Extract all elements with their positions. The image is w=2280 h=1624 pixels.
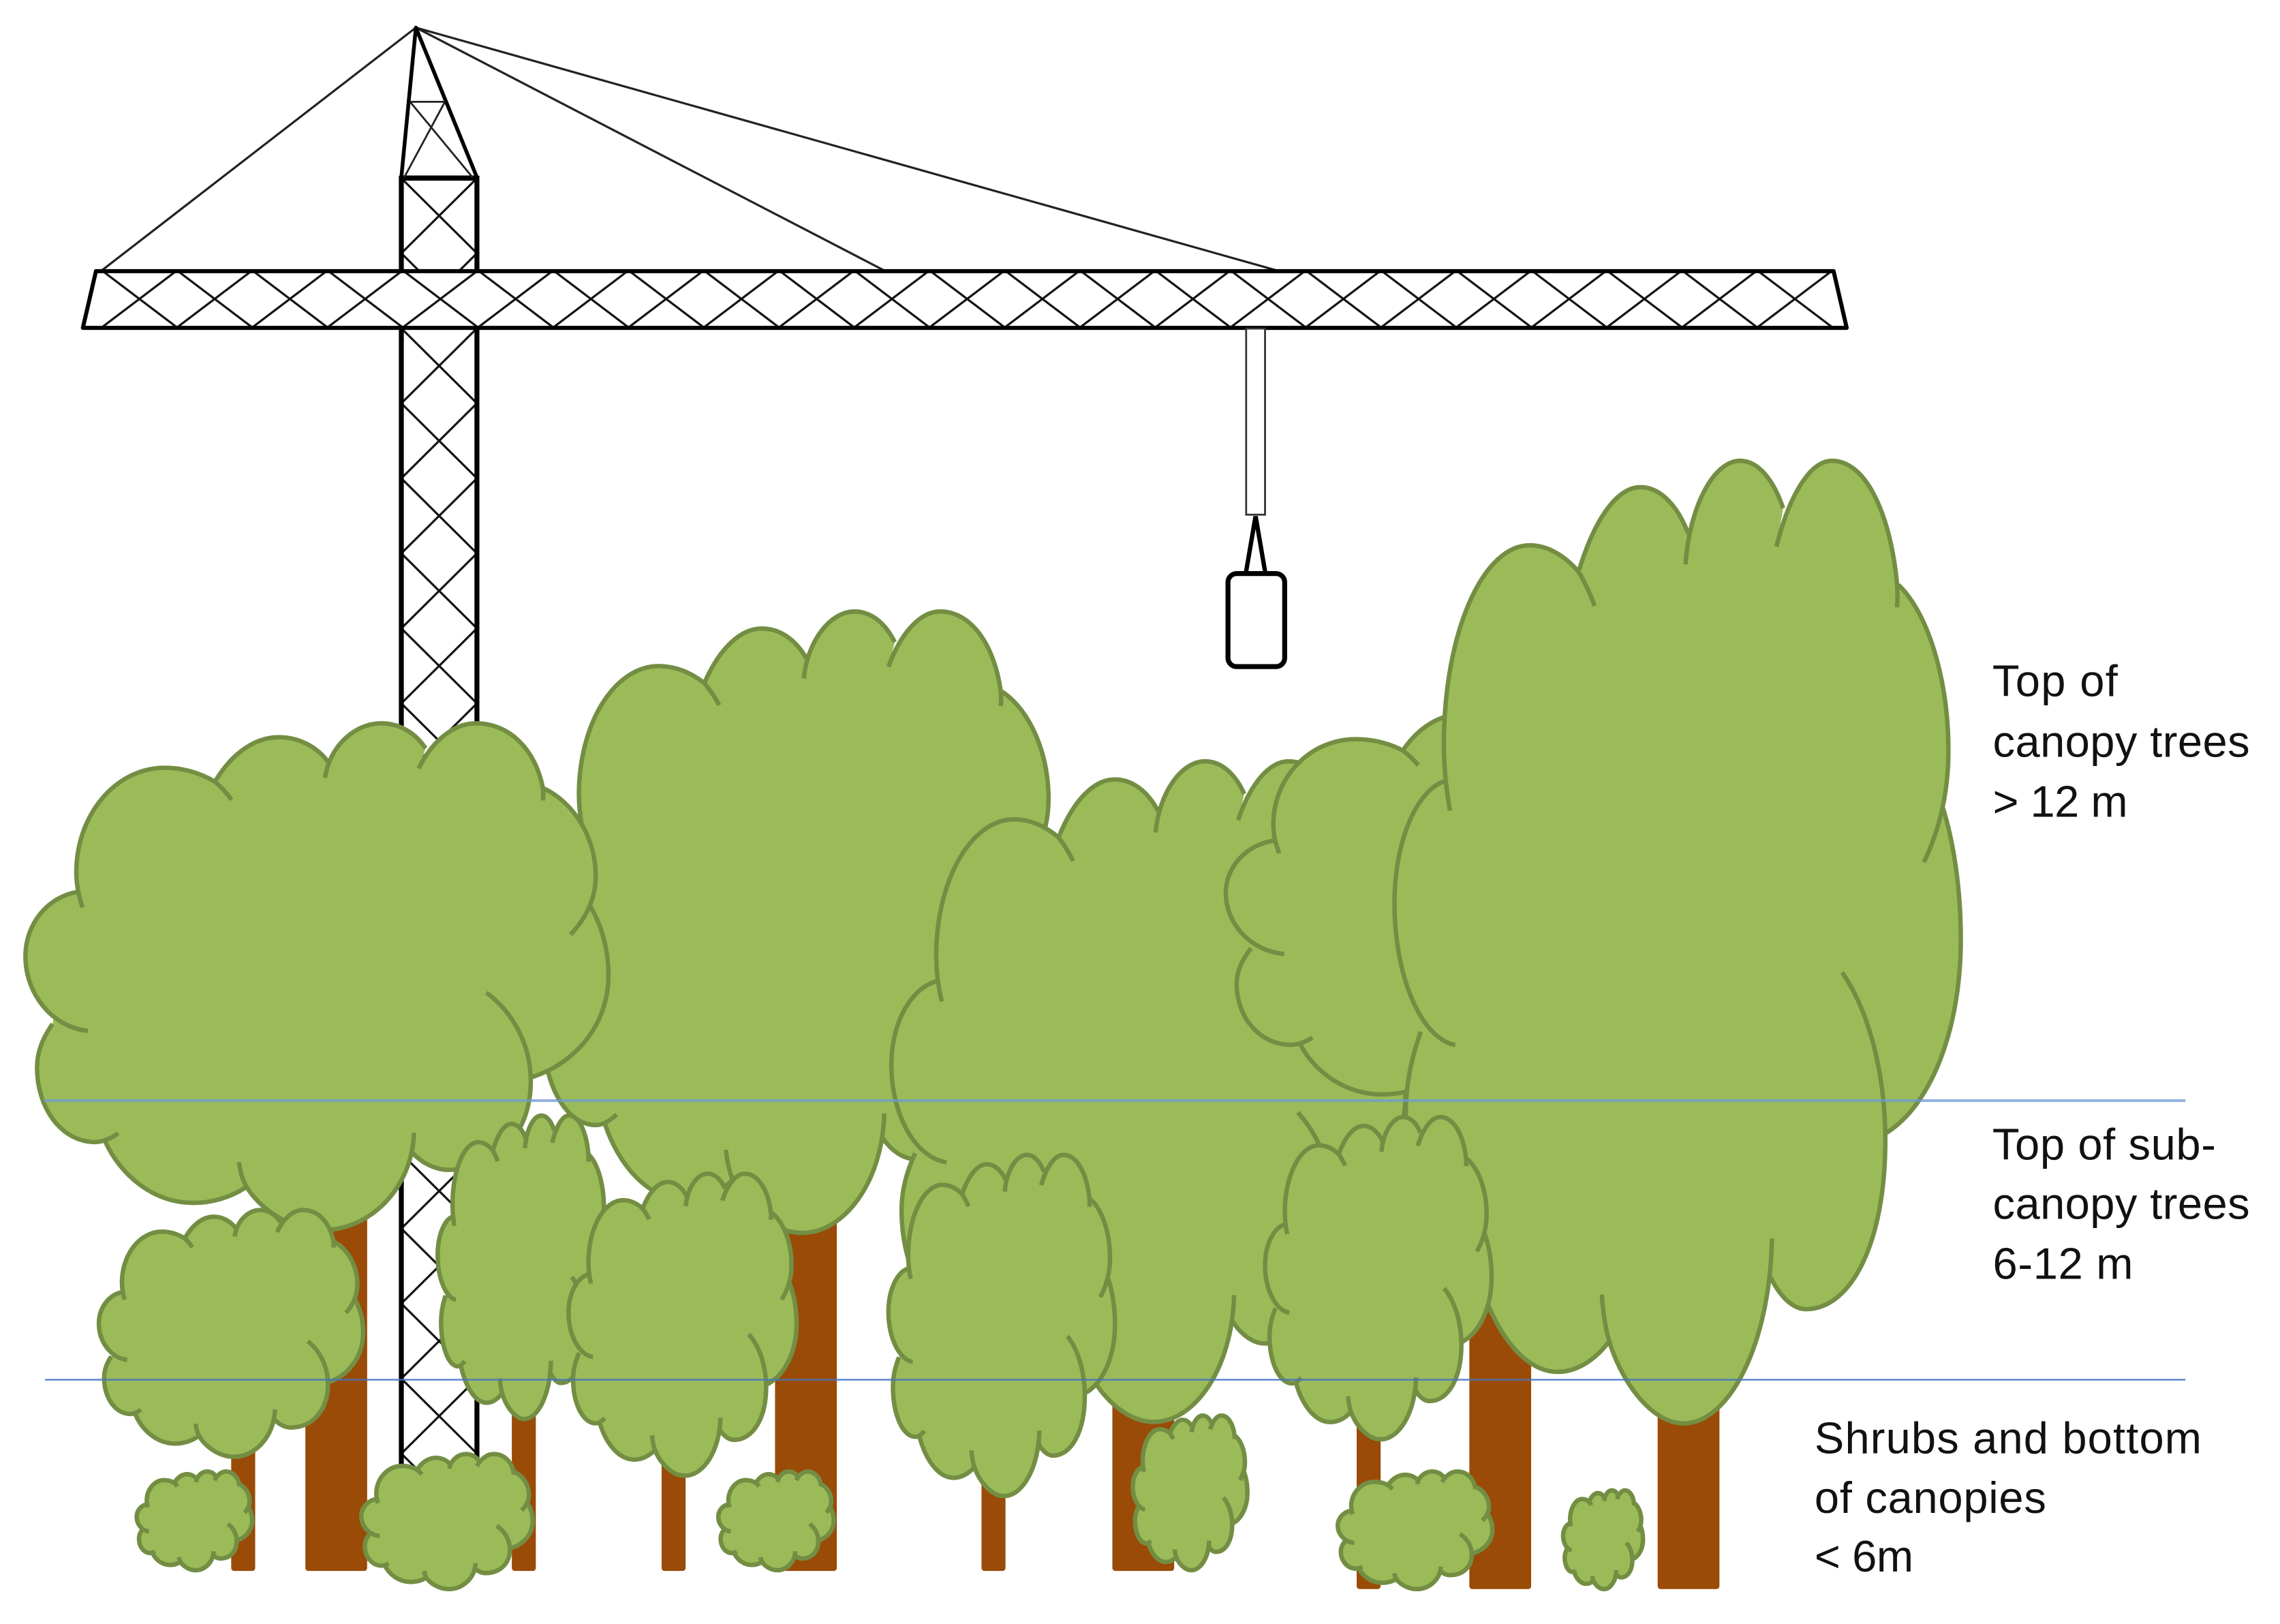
gondola xyxy=(1228,574,1284,667)
crane apex cone xyxy=(401,28,477,177)
canopy tree 1 xyxy=(25,723,608,1230)
label: canopy trees: canopy trees xyxy=(1993,717,2250,767)
crane tie cables xyxy=(102,28,1277,271)
crane jib xyxy=(83,271,1847,328)
sub-canopy tree 3 xyxy=(568,1174,797,1475)
tree trunks xyxy=(231,1207,1719,1589)
shrub 2 xyxy=(361,1454,533,1589)
label: shrubs: of canopies xyxy=(1815,1473,2046,1522)
label: sub-canopy trees xyxy=(1992,1120,2250,1289)
shrub 6 xyxy=(1563,1490,1643,1589)
label: canopy trees xyxy=(1992,656,2250,827)
shrub 5 xyxy=(1338,1471,1492,1589)
label: sub-canopy trees: canopy trees xyxy=(1993,1178,2250,1228)
label: sub-canopy trees: Top of sub- xyxy=(1992,1120,2216,1169)
crane xyxy=(83,28,1847,1472)
height line: top of shrubs xyxy=(45,1379,2185,1381)
label: sub-canopy trees: 6-12 m xyxy=(1993,1239,2133,1289)
label: shrubs: Shrubs and bottom xyxy=(1815,1413,2202,1462)
canopy tree 3 xyxy=(891,761,1406,1422)
shrub 1 xyxy=(137,1471,252,1570)
hoist arm xyxy=(1246,328,1265,515)
height line: top of sub-canopy xyxy=(44,1100,2185,1101)
canopy tree 2 xyxy=(533,611,1060,1233)
crane mast xyxy=(401,179,477,1472)
gondola hanger xyxy=(1246,516,1265,571)
label: canopy trees: Top of xyxy=(1992,656,2119,706)
canopy tree 4 xyxy=(1226,703,1770,1116)
label: shrubs xyxy=(1815,1413,2202,1581)
canopy tree 5 xyxy=(1394,461,1961,1424)
label: shrubs: < 6m xyxy=(1815,1531,1913,1581)
shrub 3 xyxy=(718,1471,834,1570)
sub-canopy tree 1 xyxy=(99,1210,363,1457)
sub-canopy tree 4 xyxy=(889,1155,1115,1496)
shrub 4 xyxy=(1133,1415,1248,1570)
label: canopy trees: > 12 m xyxy=(1993,777,2128,827)
sub-canopy tree 2 xyxy=(437,1116,608,1419)
sub-canopy tree 5 xyxy=(1265,1117,1492,1439)
